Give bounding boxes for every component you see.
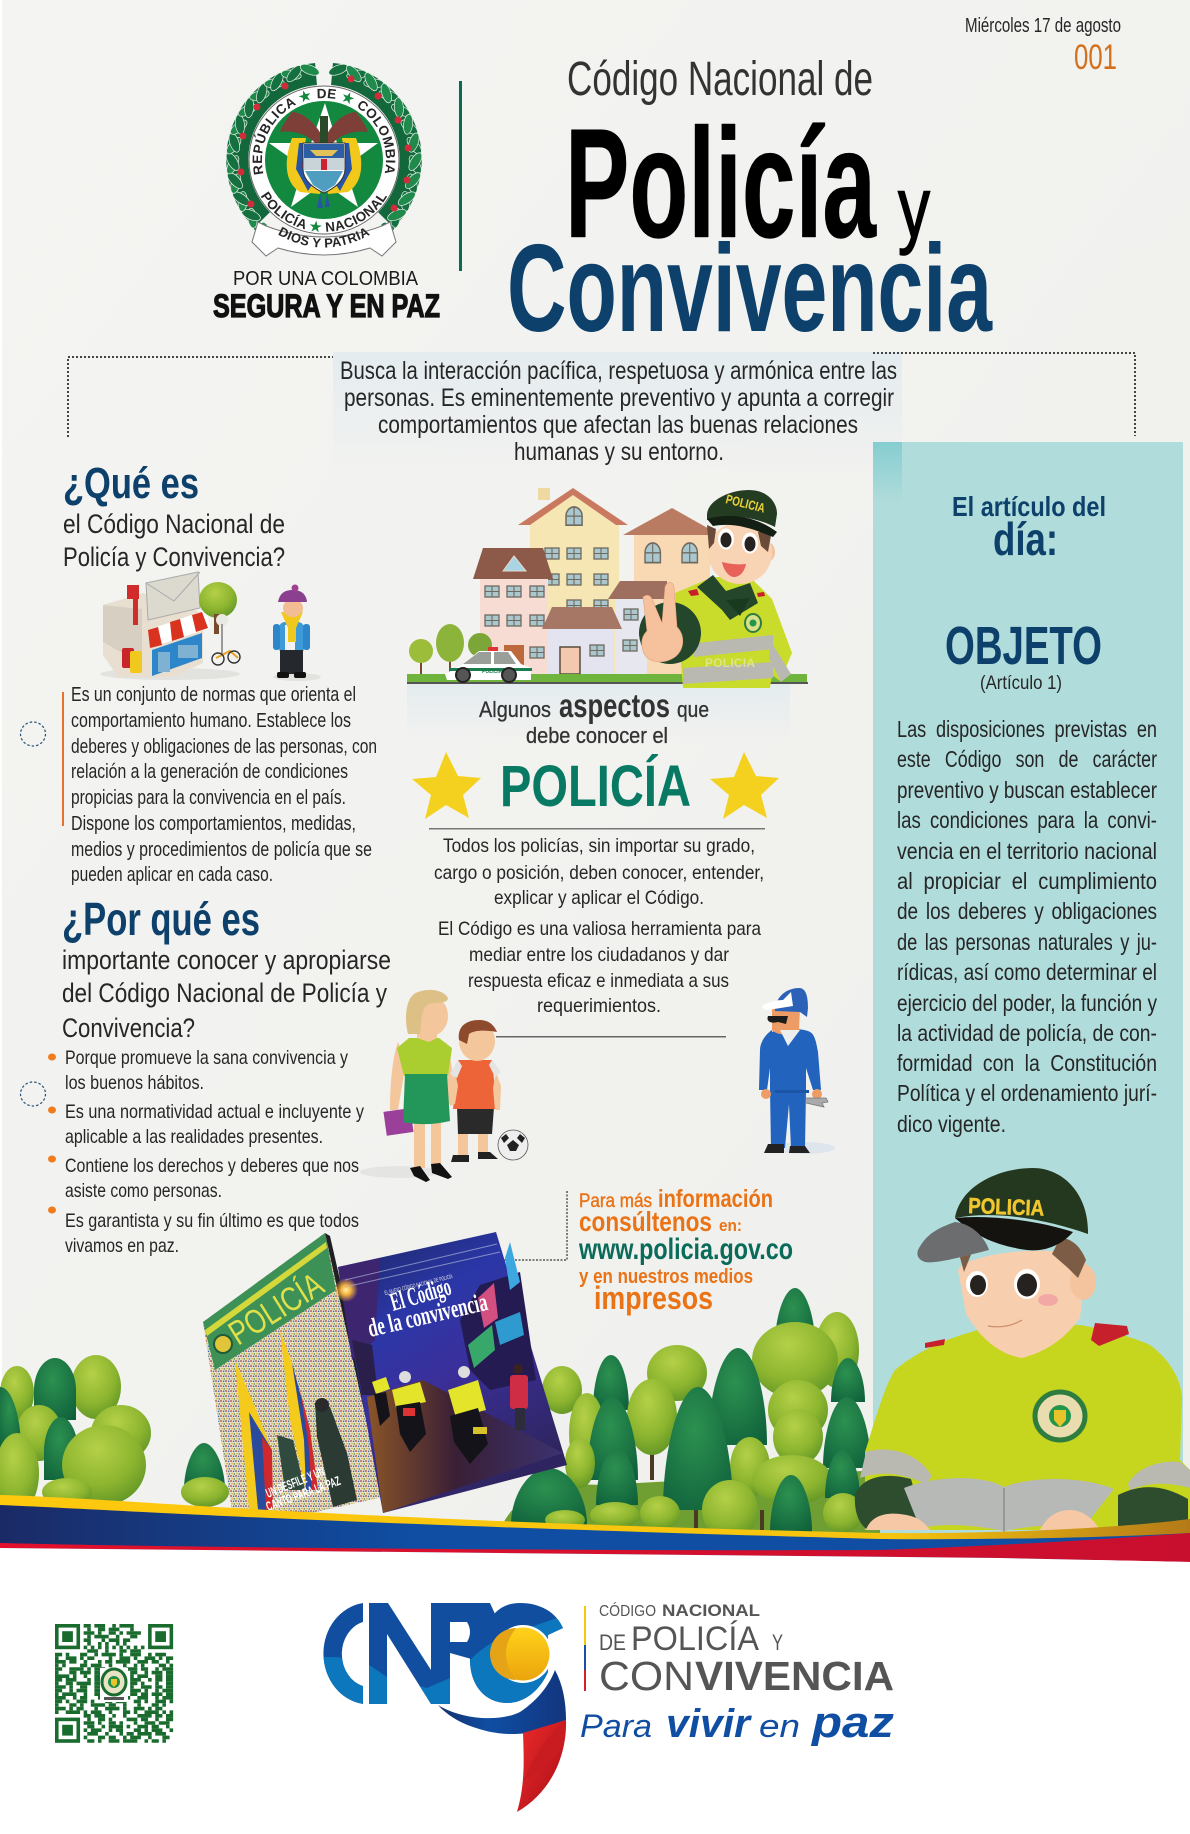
text: definition: Dispone los comportamientos, medidas,: [71, 813, 356, 835]
text: definition: [62, 684, 377, 886]
panel: article of the day: OBJETO: [945, 616, 1102, 676]
CNPC wordmark: DE: [599, 1630, 626, 1655]
main title: y: [898, 160, 930, 256]
text: what officers must do: Todos los policías, sin importar su grado,: [443, 835, 755, 857]
issue number: 001: [1074, 38, 1117, 77]
magazine: Policía cover: UN DESFILE Y UN: [264, 1464, 327, 1501]
CNPC wordmark: POLICÍA: [631, 1620, 759, 1658]
heading: aspects the police must know: que: [677, 697, 709, 722]
text: definition: relación a la generación de condiciones: [71, 761, 348, 783]
bullet list: Porque promueve la sana convivencia y: [65, 1047, 348, 1069]
text: what officers must do: requerimientos.: [537, 995, 661, 1017]
section: what is the code: ¿Qué es: [63, 459, 199, 508]
intro text: personas. Es eminentemente preventivo y apunta a corregir: [344, 384, 894, 412]
intro text: Busca la interacción pacífica, respetuosa y armónica entre las: [340, 357, 897, 385]
police car: POLICÍA: [482, 667, 503, 675]
forest: [0, 1288, 880, 1540]
peach building: [623, 508, 720, 675]
CNPC wordmark: VIVENCIA: [695, 1653, 894, 1699]
callout: more information: consúltenos: [579, 1206, 712, 1237]
icon: person with scarf: [273, 584, 321, 681]
icon: mail shop: [100, 572, 240, 680]
CNPC wordmark: CÓDIGO: [599, 1601, 656, 1620]
CNPC wordmark: [580, 1601, 894, 1747]
CNPC wordmark: paz: [811, 1698, 894, 1747]
illustration: city with police officer: [407, 488, 808, 739]
officer reading book: POLICIA: [968, 1193, 1045, 1221]
text: what officers must do: mediar entre los ciudadanos y dar: [469, 944, 729, 966]
callout: more information: en:: [719, 1216, 742, 1235]
heading: aspects the police must know: [479, 687, 709, 819]
section: why it matters: importante conocer y apropiarse: [62, 945, 391, 975]
text: what officers must do: explicar y aplicar el Código.: [494, 887, 704, 909]
CNPC wordmark: Para: [580, 1708, 652, 1744]
bullet list: los buenos hábitos.: [65, 1072, 204, 1094]
icon: star left: [412, 752, 481, 819]
CNPC wordmark: NACIONAL: [662, 1601, 760, 1620]
main title: Policía: [565, 97, 877, 271]
magazine: El Código de la convivencia: de la convivencia: [365, 1287, 490, 1343]
section: why it matters: del Código Nacional de Policía y: [62, 978, 387, 1008]
text: what officers must do: cargo o posición, deben conocer, entender,: [434, 862, 764, 884]
intro text: comportamientos que afectan las buenas relaciones: [378, 411, 858, 439]
bullet list: [48, 1047, 364, 1257]
pink building: [473, 548, 553, 675]
panel: article of the day: El artículo del: [952, 491, 1106, 522]
main title: Código Nacional de: [567, 53, 873, 106]
section: what is the code: Policía y Convivencia?: [63, 542, 285, 572]
magazine: Policía cover: CANTO PARA LA PAZ: [264, 1473, 342, 1514]
CNPC wordmark: CON: [599, 1653, 694, 1699]
text: definition: Es un conjunto de normas que orienta el: [71, 684, 356, 706]
police officer waving: POLICIA: [724, 491, 767, 516]
panel: article of the day: (Artículo 1): [980, 673, 1062, 694]
white buildings: [542, 581, 667, 675]
section: what is the code: [63, 459, 285, 572]
police car: [445, 647, 532, 682]
flag ribbon: [0, 1495, 1190, 1580]
text: definition: deberes y obligaciones de las personas, con: [71, 736, 377, 758]
bullet list: vivamos en paz.: [65, 1235, 179, 1257]
magazine: Policía cover: [203, 1233, 389, 1530]
section: why it matters: ¿Por qué es: [62, 893, 260, 945]
bullet list: aplicable a las realidades presentes.: [65, 1126, 323, 1148]
police seal: REPÚBLICA ★ DE ★ COLOMBIA: [252, 88, 396, 175]
date: Miércoles 17 de agosto: [965, 15, 1121, 37]
heading: aspects the police must know: Algunos: [479, 697, 551, 722]
callout: more information: [463, 1185, 793, 1316]
police seal: [226, 63, 422, 257]
magazine: El Código de la convivencia: El Código: [387, 1272, 454, 1317]
magazine: Policía cover: POLICÍA: [222, 1265, 331, 1353]
text: definition: medios y procedimientos de policía que se: [71, 839, 372, 861]
text: definition: comportamiento humano. Establece los: [71, 710, 351, 732]
text: definition: pueden aplicar en cada caso.: [71, 864, 273, 886]
heading: aspects the police must know: aspectos: [559, 687, 670, 724]
section: what is the code: el Código Nacional de: [63, 509, 285, 539]
heading: aspects the police must know: POLICÍA: [500, 754, 691, 819]
CNPC logo: [323, 1603, 566, 1812]
police officer waving: POLICIA: [705, 656, 757, 670]
icon: star right: [710, 752, 779, 819]
figures: woman and boy with ball: [360, 990, 528, 1182]
CNPC wordmark: Y: [772, 1630, 783, 1655]
police seal: DIOS Y PATRIA: [278, 226, 370, 248]
panel: article of the day: al propiciar el cumplimiento: [897, 868, 1157, 894]
text: what officers must do: El Código es una valiosa herramienta para: [438, 918, 761, 940]
bullet list: Es una normatividad actual e incluyente y: [65, 1101, 364, 1123]
police seal: POLICÍA ★ NACIONAL: [260, 191, 388, 232]
slogan: POR UNA COLOMBIA: [233, 268, 419, 290]
officer reading book: [855, 1168, 1190, 1532]
callout: more information: www.policia.gov.co: [578, 1233, 793, 1266]
bullet list: asiste como personas.: [65, 1180, 222, 1202]
section: why it matters: [62, 893, 391, 1043]
callout: more information: impresos: [594, 1280, 713, 1316]
slogan: [213, 268, 440, 324]
callout: more information: información: [658, 1185, 773, 1213]
bullet list: Es garantista y su fin último es que todos: [65, 1210, 359, 1232]
panel: article of the day: día:: [993, 513, 1058, 565]
intro text: humanas y su entorno.: [514, 438, 724, 466]
text: definition: propicias para la convivencia en el país.: [71, 787, 346, 809]
slogan: SEGURA Y EN PAZ: [213, 288, 440, 324]
intro text: [340, 357, 897, 466]
panel: article of the day: [873, 442, 1183, 1540]
callout: more information: Para más: [579, 1191, 652, 1212]
trees: [409, 624, 492, 675]
section: why it matters: Convivencia?: [62, 1013, 195, 1043]
panel: article of the day: dico vigente.: [897, 1111, 1006, 1137]
main title: [507, 53, 993, 358]
figure: mechanic: [759, 988, 835, 1154]
yellow building: [518, 488, 628, 675]
CNPC wordmark: vivir: [666, 1702, 752, 1746]
magazine: El Código de la convivencia: [334, 1232, 567, 1513]
QR code: [55, 1624, 173, 1743]
heading: aspects the police must know: debe conocer el: [526, 723, 668, 748]
police officer waving: [639, 490, 792, 688]
callout: more information: y en nuestros medios: [579, 1266, 753, 1288]
magazine: El Código de la convivencia: EL NUEVO CÓDIGO NACIONAL DE POLICÍA: [384, 1273, 453, 1297]
text: what officers must do: respuesta eficaz e inmediata a sus: [468, 970, 729, 992]
text: what officers must do: [434, 835, 764, 1017]
bullet list: Contiene los derechos y deberes que nos: [65, 1155, 359, 1177]
CNPC wordmark: en: [759, 1708, 800, 1744]
